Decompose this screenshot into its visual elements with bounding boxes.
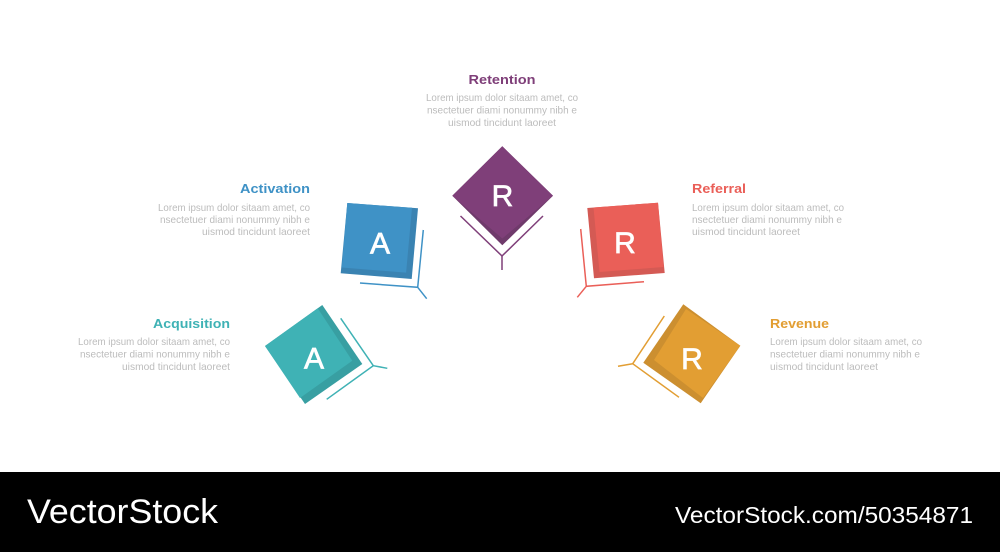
text block: Revenue: Lorem ipsum dolor sitaam amet, co bbox=[770, 336, 922, 348]
tile: Referral R: R bbox=[614, 227, 636, 260]
tile: Acquisition A: A bbox=[304, 342, 324, 375]
text block: Retention bbox=[426, 72, 578, 129]
text block: Revenue: nsectetuer diami nonummy nibh e bbox=[770, 348, 920, 360]
tile: Retention R: R bbox=[492, 180, 513, 213]
tile: Retention R bbox=[452, 146, 553, 245]
bracket: Activation bbox=[360, 230, 427, 299]
text block: Referral: Referral bbox=[692, 181, 746, 196]
text block: Revenue: Revenue bbox=[770, 316, 829, 331]
tile: Revenue R: R bbox=[681, 343, 703, 376]
text block: Referral: nsectetuer diami nonummy nibh e bbox=[692, 214, 842, 226]
text block: Referral: uismod tincidunt laoreet bbox=[692, 226, 800, 238]
text block: Acquisition bbox=[78, 316, 230, 373]
text block: Acquisition: uismod tincidunt laoreet bbox=[122, 361, 230, 373]
bracket: Retention bbox=[460, 216, 543, 270]
bracket: Revenue bbox=[618, 316, 679, 397]
text block: Retention: Retention bbox=[468, 72, 536, 87]
text block: Acquisition: nsectetuer diami nonummy nibh e bbox=[80, 348, 230, 360]
text block: Retention: uismod tincidunt laoreet bbox=[448, 117, 556, 129]
footer logo text: VectorStock bbox=[27, 493, 219, 531]
text block: Revenue: uismod tincidunt laoreet bbox=[770, 361, 878, 373]
bracket: Acquisition bbox=[327, 318, 387, 399]
text block: Activation: nsectetuer diami nonummy nibh e bbox=[160, 214, 310, 226]
text block: Activation: uismod tincidunt laoreet bbox=[202, 226, 310, 238]
text block: Activation: Lorem ipsum dolor sitaam amet, co bbox=[158, 202, 310, 214]
tile: Revenue R bbox=[643, 304, 740, 403]
text block: Acquisition: Acquisition bbox=[153, 316, 230, 331]
tile: Activation A: A bbox=[370, 227, 390, 260]
text block: Retention: Lorem ipsum dolor sitaam amet, co bbox=[426, 92, 578, 104]
footer band bbox=[0, 472, 1000, 552]
text block: Acquisition: Lorem ipsum dolor sitaam amet, co bbox=[78, 336, 230, 348]
text block: Referral: Lorem ipsum dolor sitaam amet, co bbox=[692, 202, 844, 214]
text block: Activation bbox=[158, 181, 310, 238]
text block: Referral bbox=[692, 181, 844, 238]
tile: Acquisition A bbox=[265, 305, 362, 404]
text block: Retention: nsectetuer diami nonummy nibh e bbox=[427, 104, 577, 116]
tile: Activation A bbox=[341, 203, 418, 279]
text block: Revenue bbox=[770, 316, 922, 373]
footer image id text: VectorStock.com/50354871 bbox=[675, 502, 973, 528]
tile: Referral R bbox=[587, 203, 665, 278]
text block: Activation: Activation bbox=[240, 181, 310, 196]
bracket: Referral bbox=[577, 229, 644, 297]
